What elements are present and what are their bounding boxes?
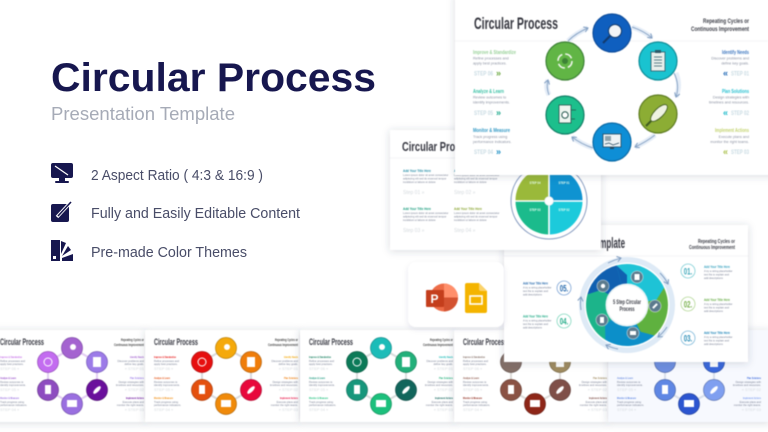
right step 03: Execute plans and: [719, 135, 749, 139]
step 05: [523, 280, 571, 296]
bottom slide 5: blue theme: Monitor & Measure: [617, 396, 636, 400]
bottom slide 4: brown theme: Review outcomes to: [463, 380, 487, 384]
bottom slide 3: green theme: STEP 06 »: [309, 366, 329, 371]
left step 04: [473, 128, 512, 156]
bottom slide 3: green theme: apply best practices.: [309, 362, 333, 366]
bottom slide 2: orange and red theme: Refine processes and: [154, 359, 180, 363]
bottom slide 1: purple theme: « STEP 01: [125, 366, 145, 371]
bottom slide 1: purple theme: Implement Actions: [126, 396, 144, 400]
icon: color swatches: [51, 240, 73, 261]
slide heading: Circular Process Template: [525, 235, 625, 252]
wheel centre label: 5 Step Circular: [613, 299, 641, 306]
bottom slide 1: purple theme: monitor the right teams.: [117, 403, 144, 407]
left step 05: STEP 05: [474, 110, 493, 117]
left step 06: [473, 50, 516, 78]
bottom slide 2: orange and red theme: [145, 330, 299, 422]
step 02: add descriptions: [704, 309, 724, 313]
bottom slide 1: purple theme: STEP 04 »: [0, 407, 20, 412]
text block 2: incididunt ut labore et dolore: [454, 180, 487, 184]
chart: five step wheel: [579, 257, 675, 353]
right step 01: Discover problems and: [711, 56, 749, 60]
quadrant labels: [530, 181, 570, 212]
text block 4: Lorem ipsum dolor sit amet consectetur: [454, 211, 500, 215]
quadrant labels: STEP 01: [558, 181, 570, 185]
left step 04: performance indicators.: [473, 140, 512, 144]
bottom slide 1: purple theme: Plan Solutions: [130, 376, 144, 380]
bottom slide 2: orange and red theme: Review outcomes to: [154, 380, 178, 384]
left step 04: Monitor & Measure: [473, 128, 510, 134]
text block 3: adipiscing elit sed do eiusmod tempor: [403, 214, 447, 218]
bottom slide 1: purple theme: Design strategies with: [119, 380, 145, 384]
right step 02: [709, 89, 749, 118]
bottom slide 2: orange and red theme: monitor the right teams.: [271, 403, 298, 407]
left step 05: [473, 89, 510, 118]
step 02: text fits to explain and: [704, 306, 730, 310]
bottom slide 4: brown theme: Design strategies with: [582, 380, 608, 384]
bottom slide 5: blue theme: [608, 330, 768, 422]
bottom slide 2: orange and red theme: « STEP 03: [279, 407, 299, 412]
panel: quadrant slide: [390, 130, 601, 250]
feature: color themes: Pre-made Color Themes: [91, 245, 247, 261]
step 01: 01.: [684, 266, 692, 276]
right step 01: Identify Needs: [722, 50, 749, 56]
text block 2: Add Your Title Here: [454, 168, 483, 173]
bottom slide 2: orange and red theme: Repeating Cycles or: [275, 338, 298, 342]
step 03: [681, 330, 733, 346]
wheel centre label: [613, 299, 641, 313]
step 01: Add Your Title Here: [704, 264, 731, 269]
feature: editable content: Fully and Easily Editable Content: [91, 206, 300, 222]
bottom slide 2: orange and red theme: Discover problems and: [271, 359, 299, 363]
bottom slide 2: orange and red theme: Design strategies with: [273, 380, 299, 384]
bottom slide 3: green theme: Continuous Improvement: [423, 343, 454, 347]
bottom slide 1: purple theme: Monitor & Measure: [0, 396, 19, 400]
bottom slide 2: orange and red theme: Plan Solutions: [284, 376, 298, 380]
right step 03: monitor the right teams.: [710, 140, 749, 144]
bottom slide 3: green theme: Plan Solutions: [439, 376, 453, 380]
feature list: [51, 163, 300, 261]
bottom slide 4: brown theme: Plan Solutions: [593, 376, 607, 380]
slide subheading: [689, 239, 736, 251]
step 02: [681, 297, 733, 313]
bottom slide 3: green theme: Discover problems and: [426, 359, 454, 363]
feature: aspect ratio: 2 Aspect Ratio ( 4:3 & 16:9 ): [91, 168, 263, 184]
bottom slide 1: purple theme: Refine processes and: [0, 359, 26, 363]
bottom slide 3: green theme: [300, 330, 454, 422]
bottom slide 2: orange and red theme: « STEP 01: [279, 366, 299, 371]
text block 4: Add Your Title Here: [454, 206, 483, 211]
text block 1: [403, 168, 449, 196]
text block 3: Lorem ipsum dolor sit amet consectetur: [403, 211, 449, 215]
text block 4: [454, 206, 500, 234]
right step 03: STEP 03: [731, 149, 749, 156]
step 05: add descriptions: [523, 292, 543, 296]
bottom slide 3: green theme: Monitor & Measure: [309, 396, 328, 400]
left step 06: STEP 06: [474, 70, 493, 78]
step 01: [681, 264, 733, 280]
step 04: Add Your Title Here: [523, 314, 549, 318]
step 03: 03.: [684, 334, 692, 344]
step 04: add descriptions: [523, 326, 543, 330]
bottom slide 3: green theme: Identify Needs: [439, 355, 453, 359]
wheel centre label: Process: [620, 306, 635, 313]
bottom slide 2: orange and red theme: Execute plans and: [277, 400, 299, 404]
bottom slide 2: orange and red theme: identify improvements.: [154, 383, 180, 387]
bottom slide 1: purple theme: Improve & Standardize: [0, 355, 22, 359]
bottom slide 1: purple theme: « STEP 03: [125, 407, 145, 412]
bottom slide 5: blue theme: identify improvements.: [617, 383, 643, 387]
step circle: document: [546, 96, 584, 134]
step 04: text fits to explain and: [523, 322, 549, 326]
left step 04: Track progress using: [473, 135, 507, 139]
right step 03: «: [723, 146, 728, 156]
icon: edit: [51, 202, 71, 222]
left step 04: »: [496, 146, 501, 156]
quadrant labels: STEP 04: [530, 181, 541, 185]
bottom slide 3: green theme: Refine processes and: [309, 359, 335, 363]
bottom slide 5: blue theme: Plan Solutions: [747, 376, 761, 380]
bottom slide 3: green theme: « STEP 03: [434, 407, 454, 412]
bottom slide 4: brown theme: Track progress using: [463, 400, 488, 404]
bottom slide 3: green theme: « STEP 01: [434, 366, 454, 371]
step 02: Add Your Title Here: [704, 297, 731, 302]
bottom slide 1: purple theme: performance indicators.: [0, 403, 27, 407]
icon: monitor: [51, 163, 73, 183]
text block 1: adipiscing elit sed do eiusmod tempor: [403, 176, 447, 180]
bottom slide 3: green theme: performance indicators.: [309, 403, 336, 407]
text block 3: Add Your Title Here: [403, 206, 432, 211]
step circle: rocket: [639, 95, 677, 133]
bottom slide 5: blue theme: Execute plans and: [740, 400, 762, 404]
bottom slide 2: orange and red theme: define key goals.: [279, 362, 298, 366]
bottom slide 1: purple theme: Discover problems and: [117, 359, 145, 363]
bottom slide 1: purple theme: Track progress using: [0, 400, 25, 404]
bottom slide 1: purple theme: Execute plans and: [123, 400, 145, 404]
step circle: cycle: [546, 42, 584, 80]
panel: main circular process slide: [455, 0, 768, 175]
bottom slide 2: orange and red theme: STEP 04 »: [154, 407, 174, 412]
bottom slide 3: green theme: Execute plans and: [432, 400, 454, 404]
bottom slide 5: blue theme: Review outcomes to: [617, 380, 641, 384]
bottom slide 1: purple theme: identify improvements.: [0, 383, 26, 387]
bottom slide 2: orange and red theme: timelines and resources.: [270, 383, 298, 387]
quadrant labels: STEP 03: [530, 208, 541, 212]
text block 3: incididunt ut labore et dolore: [403, 218, 436, 222]
bottom slide 2: orange and red theme: STEP 05 »: [154, 387, 174, 392]
quadrant labels: STEP 02: [558, 208, 570, 212]
bottom slide 3: green theme: STEP 05 »: [309, 387, 329, 392]
slide heading: Circular Process: [402, 140, 476, 154]
main title: Circular Process: [51, 56, 376, 100]
step 03: Add Your Title Here: [704, 330, 731, 335]
bottom slide 2: orange and red theme: Identify Needs: [284, 355, 298, 359]
bottom slide 1: purple theme: Analyze & Learn: [0, 376, 16, 380]
text block 1: Add Your Title Here: [403, 168, 432, 173]
right step 01: define key goals.: [721, 62, 749, 66]
step 04: [523, 314, 571, 330]
bottom slide 3: green theme: « STEP 02: [434, 387, 454, 392]
bottom slide 2: orange and red theme: Continuous Improvement: [268, 343, 299, 347]
icon: PowerPoint: P: [430, 292, 439, 306]
chart: quadrant circle: [511, 163, 587, 239]
bottom slide 2: orange and red theme: STEP 06 »: [154, 366, 174, 371]
bottom slide 3: green theme: Analyze & Learn: [309, 376, 325, 380]
bottom slide 5: blue theme: Analyze & Learn: [617, 376, 633, 380]
bottom slide 2: orange and red theme: apply best practices.: [154, 362, 178, 366]
bottom slide 3: green theme: STEP 04 »: [309, 407, 329, 412]
bottom slide 4: brown theme: Execute plans and: [586, 400, 608, 404]
step circle: dashboard: [593, 123, 631, 161]
text block 2: Step 02 »: [454, 190, 476, 196]
bottom slide 1: purple theme: STEP 05 »: [0, 387, 20, 392]
bottom slide 4: brown theme: monitor the right teams.: [580, 403, 607, 407]
bottom slide 3: green theme: Design strategies with: [428, 380, 454, 384]
right step 01: [711, 50, 749, 78]
slide subheading: Continuous Improvement: [689, 245, 735, 251]
bottom slide 2: orange and red theme: Circular Process: [154, 337, 198, 348]
left step 05: Analyze & Learn: [473, 89, 504, 95]
bottom slide 1: purple theme: [0, 330, 145, 422]
bottom slide 5: blue theme: STEP 05 »: [617, 387, 637, 392]
slide heading: Circular Process: [474, 14, 558, 33]
bottom slide 1: purple theme: apply best practices.: [0, 362, 24, 366]
bottom slide 4: brown theme: timelines and resources.: [579, 383, 607, 387]
subtitle: Presentation Template: [51, 104, 235, 124]
bottom slide 3: green theme: Circular Process: [309, 337, 353, 348]
bottom slide 3: green theme: monitor the right teams.: [426, 403, 453, 407]
bottom slide 4: brown theme: « STEP 02: [588, 387, 608, 392]
step 02: 02.: [684, 300, 692, 310]
text block 4: adipiscing elit sed do eiusmod tempor: [454, 214, 498, 218]
bottom slide 3: green theme: Track progress using: [309, 400, 334, 404]
slide subheading: Repeating Cycles or: [698, 239, 736, 245]
panel: five step wheel slide: [504, 225, 748, 362]
bottom slide 4: brown theme: Improve & Standardize: [463, 355, 485, 359]
bottom slide 4: brown theme: [454, 330, 608, 422]
step circle: magnifier: [593, 14, 631, 52]
bottom slide 3: green theme: define key goals.: [434, 362, 453, 366]
bottom slide 3: green theme: Repeating Cycles or: [430, 338, 453, 342]
right step 01: «: [723, 68, 728, 78]
wheel arrows: [580, 258, 668, 349]
left step 04: STEP 04: [474, 149, 493, 156]
bottom slide 2: orange and red theme: Implement Actions: [280, 396, 298, 400]
text block 3: [403, 206, 449, 234]
bottom slide 5: blue theme: Track progress using: [617, 400, 642, 404]
text block 2: Lorem ipsum dolor sit amet consectetur: [454, 173, 500, 177]
icon: Google Slides: [465, 283, 487, 313]
step 05: text fits to explain and: [523, 289, 549, 293]
step 01: A try a string placeholder: [704, 269, 733, 273]
text block 1: Step 01 »: [403, 190, 425, 196]
bottom slide 1: purple theme: Repeating Cycles or: [121, 338, 144, 342]
bottom slide 2: orange and red theme: Monitor & Measure: [154, 396, 173, 400]
cycle arrows: [547, 27, 678, 148]
bottom slide 5: blue theme: performance indicators.: [617, 403, 644, 407]
bottom slide 5: blue theme: STEP 04 »: [617, 407, 637, 412]
bottom slide 3: green theme: timelines and resources.: [425, 383, 453, 387]
bottom slide 1: purple theme: Circular Process: [0, 337, 44, 348]
left step 06: Improve & Standardize: [473, 50, 516, 56]
bottom slide 5: blue theme: monitor the right teams.: [734, 403, 761, 407]
panel: app logos: [408, 262, 504, 327]
right step 02: timelines and resources.: [709, 100, 749, 104]
bottom slide 2: orange and red theme: Track progress using: [154, 400, 179, 404]
step 05: Add Your Title Here: [523, 280, 549, 286]
slide subheading: [691, 18, 750, 33]
text block 1: Lorem ipsum dolor sit amet consectetur: [403, 173, 449, 177]
bottom slide 4: brown theme: Refine processes and: [463, 359, 489, 363]
bottom slide 4: brown theme: STEP 04 »: [463, 407, 483, 412]
bottom slide 5: blue theme: « STEP 03: [742, 407, 762, 412]
step 04: 04.: [560, 316, 568, 326]
right step 02: Plan Solutions: [722, 89, 749, 95]
bottom slide 5: blue theme: Design strategies with: [736, 380, 762, 384]
text block 3: Step 03 »: [403, 228, 425, 234]
text block 2: [454, 168, 500, 196]
step 01: add descriptions: [704, 276, 724, 280]
left step 05: identify improvements.: [473, 100, 510, 104]
step 03: text fits to explain and: [704, 338, 730, 342]
bottom slide 1: purple theme: Continuous Improvement: [114, 343, 145, 347]
bottom slide 4: brown theme: Implement Actions: [589, 396, 607, 400]
step 04: A try a string placeholder: [523, 318, 552, 322]
step 02: A try a string placeholder: [704, 302, 733, 306]
bottom slide 4: brown theme: STEP 05 »: [463, 387, 483, 392]
right step 03: Implement Actions: [715, 128, 749, 134]
step 05: 05.: [560, 284, 568, 294]
bottom slide 4: brown theme: Monitor & Measure: [463, 396, 482, 400]
right step 02: Design strategies with: [713, 96, 749, 100]
bottom slide 5: blue theme: « STEP 02: [742, 387, 762, 392]
right step 01: STEP 01: [731, 70, 749, 78]
left step 06: »: [496, 68, 501, 78]
left step 06: apply best practices.: [473, 62, 507, 66]
bottom slide 4: brown theme: Circular Process: [463, 337, 507, 348]
bottom slide 2: orange and red theme: performance indicators.: [154, 403, 181, 407]
bottom slide 5: blue theme: timelines and resources.: [733, 383, 761, 387]
bottom slide 3: green theme: Improve & Standardize: [309, 355, 331, 359]
step 03: add descriptions: [704, 342, 724, 346]
bottom slide 3: green theme: identify improvements.: [309, 383, 335, 387]
slide subheading: Repeating Cycles or: [703, 18, 749, 25]
bottom slide 4: brown theme: apply best practices.: [463, 362, 487, 366]
bottom slide 1: purple theme: define key goals.: [125, 362, 144, 366]
right step 02: STEP 02: [731, 110, 749, 117]
text block 2: adipiscing elit sed do eiusmod tempor: [454, 176, 498, 180]
left step 05: »: [496, 108, 501, 118]
bottom slide 4: brown theme: STEP 06 »: [463, 366, 483, 371]
text block 4: incididunt ut labore et dolore: [454, 218, 487, 222]
left step 05: Review outcomes to: [473, 96, 506, 100]
bottom slide 2: orange and red theme: Analyze & Learn: [154, 376, 170, 380]
bottom slide 1: purple theme: STEP 06 »: [0, 366, 20, 371]
bottom slide 1: purple theme: Identify Needs: [130, 355, 144, 359]
bottom slide 1: purple theme: Review outcomes to: [0, 380, 24, 384]
bottom slide 1: purple theme: timelines and resources.: [116, 383, 144, 387]
bottom slide 2: orange and red theme: Improve & Standardize: [154, 355, 176, 359]
right step 02: «: [723, 108, 728, 118]
step circle: clipboard: [639, 42, 677, 80]
bottom slide 3: green theme: Implement Actions: [435, 396, 453, 400]
bottom slide 4: brown theme: « STEP 03: [588, 407, 608, 412]
text block 4: Step 04 »: [454, 228, 476, 234]
wheel step icons: [596, 271, 661, 339]
right step 03: [710, 128, 749, 156]
text block 1: incididunt ut labore et dolore: [403, 180, 436, 184]
bottom slide 3: green theme: Review outcomes to: [309, 380, 333, 384]
step 01: text fits to explain and: [704, 272, 730, 276]
bottom slide 4: brown theme: identify improvements.: [463, 383, 489, 387]
step 05: A try a string placeholder: [523, 286, 552, 290]
bottom slide 4: brown theme: performance indicators.: [463, 403, 490, 407]
bottom slide 2: orange and red theme: « STEP 02: [279, 387, 299, 392]
step 03: A try a string placeholder: [704, 335, 733, 339]
bottom slide 4: brown theme: Analyze & Learn: [463, 376, 479, 380]
left step 06: Refine processes and: [473, 56, 509, 60]
bottom slide 1: purple theme: « STEP 02: [125, 387, 145, 392]
